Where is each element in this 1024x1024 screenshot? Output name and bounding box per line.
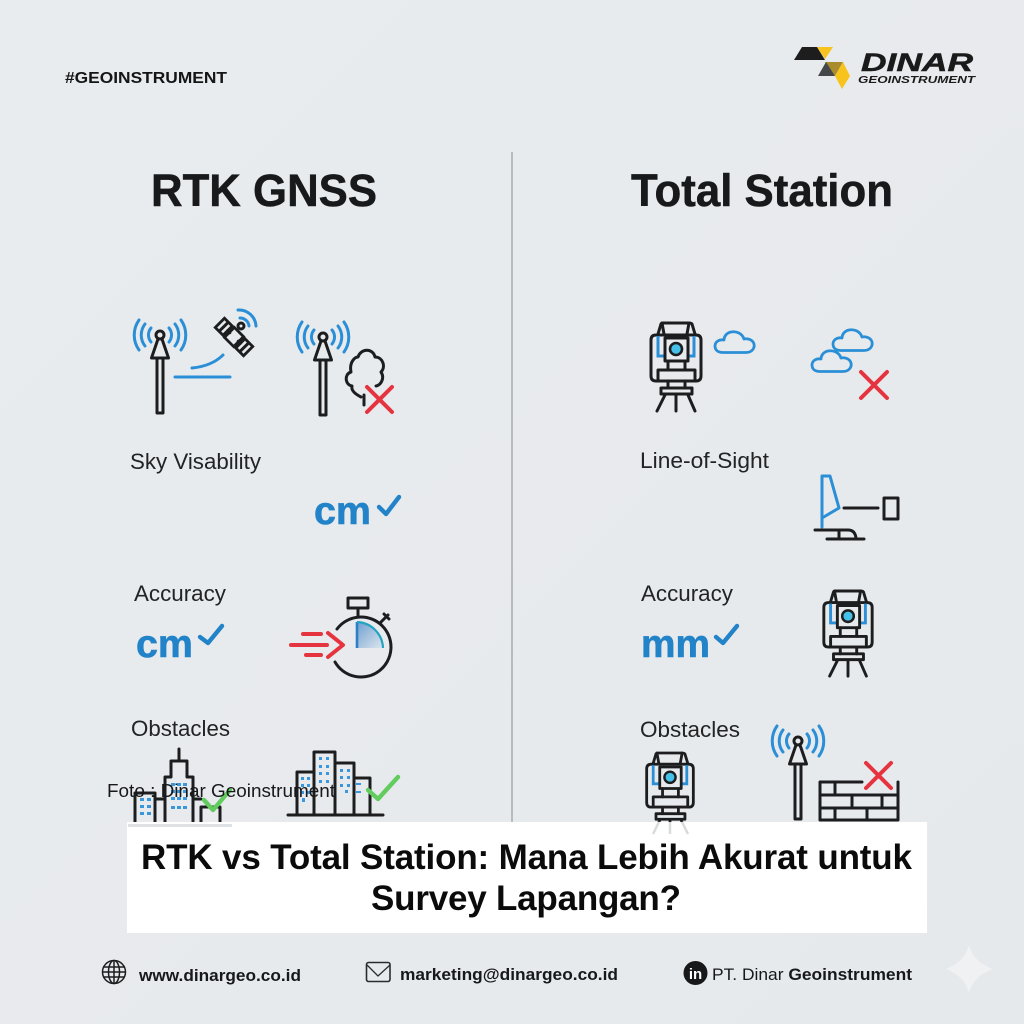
hashtag: #GEOINSTRUMENT [65, 70, 227, 87]
title text [141, 838, 913, 918]
footer: linkedin: in [689, 966, 702, 983]
icon: antenna blocked by tree [297, 322, 392, 415]
title panel [127, 822, 927, 933]
label: Obstacles: Obstacles [131, 716, 230, 741]
metric: cm check [314, 490, 399, 533]
icon: stopwatch [291, 598, 391, 677]
footer: linkedin: PT. Dinar Geoinstrument [712, 965, 912, 984]
metric: mm check: mm [641, 623, 710, 666]
icon: total station [824, 591, 872, 676]
label: Accuracy: Accuracy [134, 581, 226, 606]
icon: antenna behind brick wall [772, 726, 898, 820]
icon: city skyline with check [288, 752, 398, 815]
footer: website: www.dinargeo.co.id [138, 966, 301, 985]
footer: website [102, 960, 301, 985]
label: Accuracy: Accuracy [641, 581, 733, 606]
icon: urban buildings with check [135, 749, 230, 824]
decorative sparkle [946, 945, 993, 993]
label: Sky Visability: Sky Visability [130, 449, 261, 474]
title text: Survey Lapangan? [371, 879, 681, 918]
logo: Dinar Geoinstrument [794, 47, 977, 89]
panel: Total Station column [640, 323, 898, 835]
metric: cm check [136, 623, 222, 666]
label: Obstacles: Obstacles [640, 717, 740, 742]
photo credit: Foto : Dinar Geoinstrument [107, 781, 335, 801]
icon: total station with cloud [651, 323, 754, 411]
logo: Dinar Geoinstrument: GEOINSTRUMENT [858, 74, 977, 86]
metric: cm check: cm [136, 623, 193, 666]
title text: RTK vs Total Station: Mana Lebih Akurat untuk [141, 838, 913, 877]
metric: cm check: cm [314, 490, 371, 533]
logo: Dinar Geoinstrument: DINAR [861, 49, 973, 77]
icon: total station partially hidden [647, 753, 693, 835]
label: Line-of-Sight: Line-of-Sight [640, 448, 769, 473]
heading: Total Station: Total Station [631, 165, 893, 216]
footer: email: marketing@dinargeo.co.id [400, 965, 618, 984]
heading: RTK GNSS: RTK GNSS [151, 165, 377, 216]
icon: clouds with cross [812, 330, 887, 398]
icon: antenna with satellite [134, 310, 256, 413]
panel: RTK GNSS column [130, 310, 399, 824]
footer: linkedin [684, 961, 912, 985]
icon: line of sight prism [815, 476, 898, 539]
